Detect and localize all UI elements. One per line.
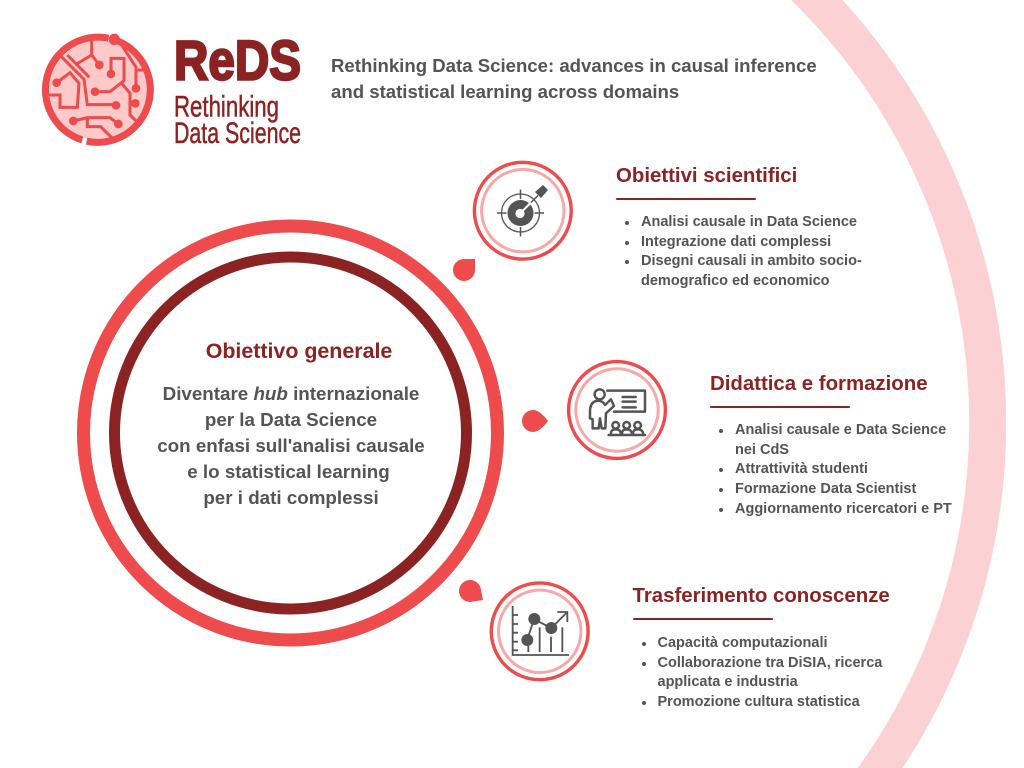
rule xyxy=(616,198,756,200)
text: central statement: per i dati complessi xyxy=(203,487,379,508)
logo xyxy=(42,28,301,150)
list: Integrazione dati complessi xyxy=(641,234,831,250)
list: Attrattività studenti xyxy=(735,461,868,477)
title: Rethinking Data Science: advances in causal inference xyxy=(331,55,817,76)
text: central statement: per la Data Science xyxy=(205,409,377,430)
logo wordmark xyxy=(174,28,301,150)
heading: Didattica e formazione xyxy=(710,372,928,394)
list xyxy=(625,214,862,289)
list: Promozione cultura statistica xyxy=(658,694,860,710)
list: Analisi causale e Data Science xyxy=(735,422,946,438)
panel: didattica e formazione xyxy=(710,372,952,517)
list: Aggiornamento ricercatori e PT xyxy=(735,501,952,517)
title xyxy=(331,55,817,102)
rule xyxy=(632,618,772,620)
icon: circuit globe xyxy=(45,34,150,142)
list xyxy=(719,422,952,517)
list: Analisi causale in Data Science xyxy=(641,214,857,230)
heading: obiettivo generale: Obiettivo generale xyxy=(206,338,392,362)
text: central statement: e lo statistical learning xyxy=(187,461,390,482)
rule xyxy=(710,406,850,408)
list: demografico ed economico xyxy=(641,273,830,289)
list: Disegni causali in ambito socio- xyxy=(641,253,862,269)
list: Formazione Data Scientist xyxy=(735,481,916,497)
list: Capacità computazionali xyxy=(658,635,828,651)
title: and statistical learning across domains xyxy=(331,81,679,102)
logo wordmark: Rethinking xyxy=(174,90,279,124)
text: central statement xyxy=(157,383,425,508)
list xyxy=(642,635,882,710)
list: Collaborazione tra DiSIA, ricerca xyxy=(658,655,882,671)
panel: obiettivi scientifici xyxy=(616,164,862,289)
logo wordmark: ReDS xyxy=(174,28,301,92)
panel: trasferimento conoscenze xyxy=(632,584,890,710)
heading: Trasferimento conoscenze xyxy=(632,584,890,606)
heading: Obiettivi scientifici xyxy=(616,164,797,186)
text: central statement: con enfasi sull'analisi causale xyxy=(157,435,425,456)
list: applicata e industria xyxy=(658,674,798,690)
text: central statement: Diventare hub internazionale xyxy=(163,383,419,404)
list: nei CdS xyxy=(735,442,789,458)
